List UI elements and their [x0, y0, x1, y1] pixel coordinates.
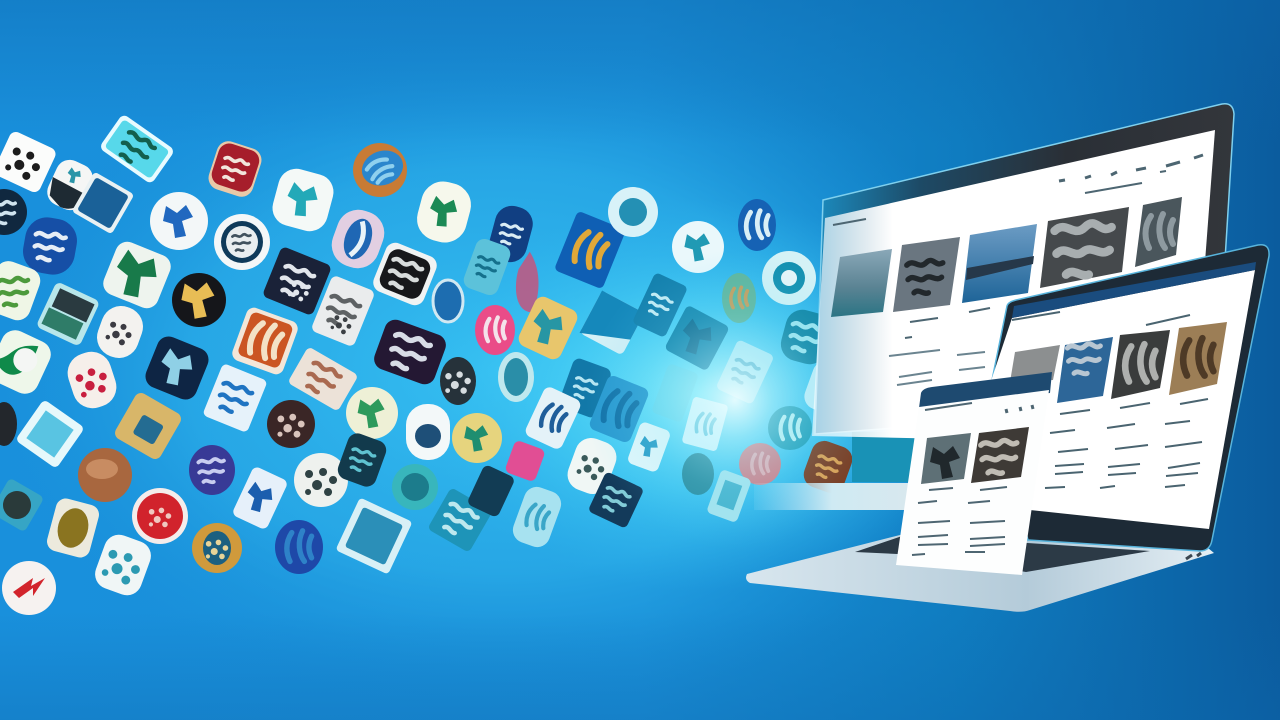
icon: app 37: [715, 339, 775, 405]
icon: app 9: [20, 214, 80, 278]
icon: app 66: [294, 453, 348, 507]
icon: app 50: [651, 363, 699, 423]
icon: app 43: [142, 333, 212, 403]
icon: app 7: [72, 172, 134, 234]
icon: app 31: [433, 280, 463, 322]
light burst: [585, 250, 885, 550]
icon: app 71: [626, 421, 672, 473]
laptop photo 3: [1111, 330, 1170, 399]
icon: app 76: [132, 488, 188, 544]
laptop keyboard: [855, 535, 1150, 572]
icon: app 40: [801, 357, 857, 419]
icon: app 73: [739, 443, 781, 485]
icon: app 2: [99, 113, 175, 185]
icon: app 69: [504, 440, 546, 482]
laptop photo 4: [1169, 322, 1227, 395]
icon: app 49: [588, 374, 650, 444]
icon: app 59: [267, 400, 315, 448]
monitor stand: [754, 432, 925, 510]
icon: app 1: [0, 130, 58, 194]
tablet top bar: [919, 372, 1052, 408]
icon: app 65: [189, 445, 235, 495]
icon: app 85: [192, 523, 242, 573]
icon: app 74: [800, 437, 856, 497]
icon: app 42: [62, 347, 122, 413]
device: tablet: [896, 372, 1052, 575]
icon: app 53: [0, 402, 17, 446]
monitor caption lines: [833, 155, 1203, 385]
icon: app 84: [2, 561, 56, 615]
laptop photo 1: [1010, 345, 1060, 382]
tablet caption lines: [912, 403, 1033, 555]
icon: app 21: [100, 238, 174, 312]
laptop caption lines: [1012, 312, 1208, 488]
icon: app 4: [268, 165, 338, 235]
laptop lid frame: [988, 245, 1269, 551]
app icon cloud: [0, 113, 880, 615]
laptop screen: [990, 270, 1255, 529]
icon: app 5: [353, 143, 408, 197]
icon: app 38: [777, 306, 835, 368]
icon: app 29: [91, 300, 149, 364]
icon: app 6: [43, 155, 97, 215]
icon: app 44: [230, 305, 300, 377]
laptop photo 2: [1057, 337, 1113, 403]
icon: app 46: [440, 357, 476, 405]
icon: app 32: [475, 305, 515, 355]
icon: app 13: [412, 177, 476, 247]
icon: app 15: [554, 211, 626, 289]
icon: app 58: [346, 387, 398, 439]
tablet photo 1: [921, 433, 971, 484]
icon: app 68: [392, 464, 438, 510]
icon: app 64: [0, 478, 44, 532]
icon: app 39: [832, 327, 880, 383]
laptop base: [746, 535, 1214, 612]
icon: app 52: [768, 406, 812, 450]
icon: app 62: [523, 385, 583, 451]
icon: app 79: [466, 464, 516, 518]
icon: app 36: [664, 305, 730, 371]
icon: app 72: [682, 453, 714, 495]
icon: app 30: [310, 275, 376, 347]
laptop ports: [1186, 553, 1201, 559]
icon: app 19: [762, 251, 816, 305]
icon: app 82: [706, 469, 752, 523]
icon: app 48: [557, 357, 613, 419]
icon: app 86: [275, 520, 323, 574]
icon: app 33: [516, 294, 580, 362]
icon: app 34: [580, 291, 644, 355]
icon: app 55: [112, 390, 184, 462]
icon: app 63: [78, 448, 132, 502]
icon: app 24: [370, 240, 440, 308]
icon: app 51: [681, 396, 729, 452]
icon: app 35: [632, 272, 688, 338]
icon: app 60: [406, 404, 450, 460]
monitor photo 2: [893, 237, 960, 312]
icon: app 77: [231, 465, 289, 531]
icon: app 47: [498, 352, 534, 402]
device: desktop monitor: [754, 104, 1234, 510]
icon: app 81: [588, 471, 644, 529]
icon: app 28: [36, 281, 100, 347]
tablet photo 2: [971, 427, 1029, 483]
icon: app 11: [214, 214, 270, 270]
icon: app 27: [0, 257, 44, 324]
icon: app 45: [371, 317, 449, 387]
icon: app 67: [335, 431, 389, 489]
monitor photo 1: [831, 249, 892, 317]
icon: app 12: [326, 204, 390, 274]
tablet screen: [896, 390, 1049, 575]
icon: app 10: [150, 192, 208, 250]
icon: app 75: [45, 496, 101, 560]
icon: app 57: [287, 346, 359, 412]
icon: app 23: [262, 246, 332, 316]
icon: app 83: [91, 530, 155, 600]
icon: app 41: [0, 326, 55, 398]
icon: app 78: [427, 487, 493, 553]
monitor frame: [815, 104, 1234, 434]
icon: app 3: [205, 138, 265, 200]
icon: app 18: [738, 199, 776, 251]
device: laptop: [746, 245, 1269, 612]
icon: app 61: [452, 413, 502, 463]
icon: app 54: [15, 399, 85, 469]
icon: app 17: [672, 221, 724, 273]
icon: app 70: [563, 433, 621, 499]
icon: app 8: [0, 189, 27, 235]
icon: app 26: [511, 250, 545, 313]
icon: app 16: [608, 187, 658, 237]
monitor screen: [812, 130, 1215, 440]
monitor photo 5: [1135, 197, 1182, 267]
icon: app 14: [485, 202, 537, 266]
monitor photo 3: [962, 224, 1037, 303]
icon: app 25: [461, 236, 513, 298]
icon: app 87: [335, 497, 413, 575]
icon: app 80: [509, 483, 565, 551]
icon: app 56: [202, 363, 268, 433]
icon: app 22: [172, 273, 226, 327]
icon: app 20: [722, 273, 756, 323]
laptop top bar: [1012, 262, 1256, 318]
monitor photo 4: [1040, 207, 1129, 288]
